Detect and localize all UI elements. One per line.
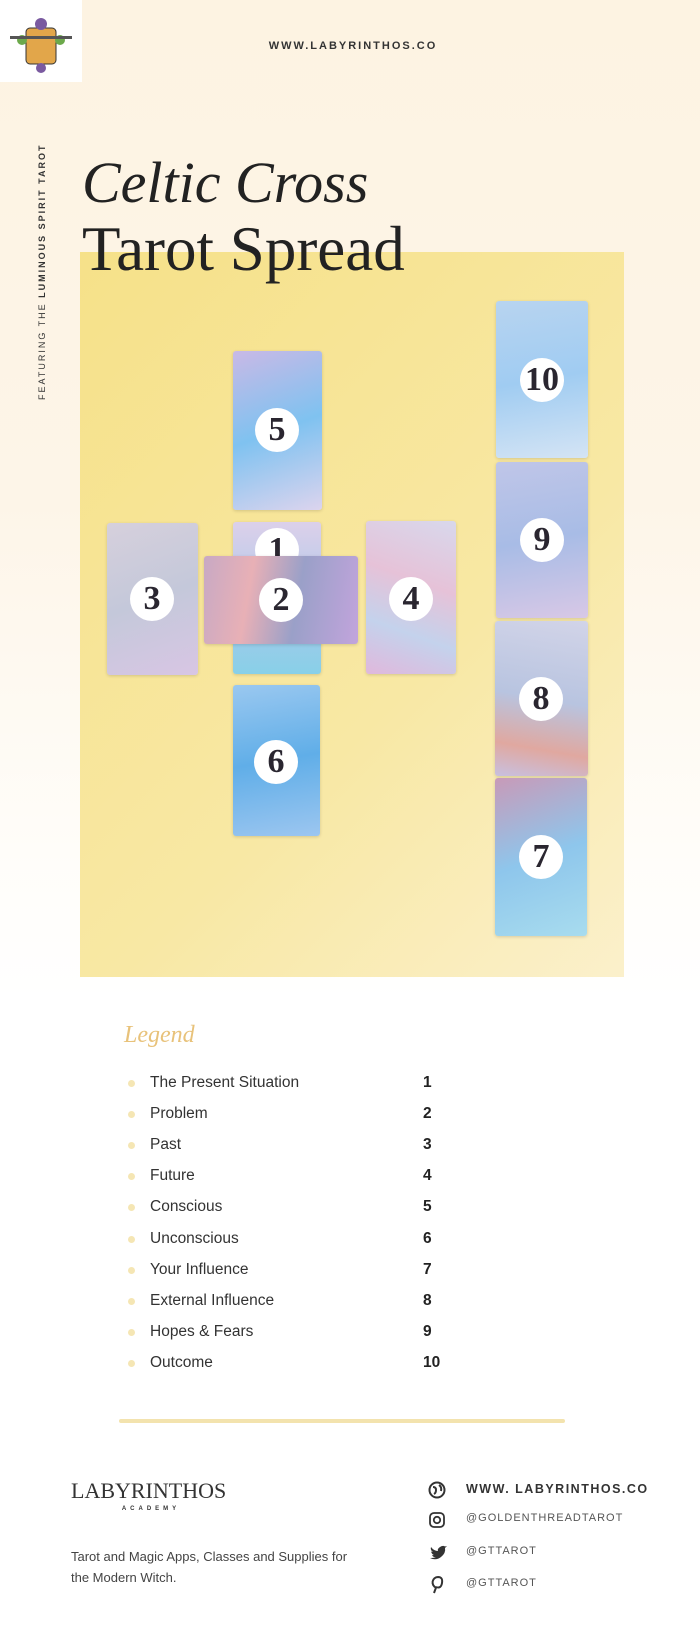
legend list: 9 (423, 1323, 432, 1340)
legend list: 8 (423, 1292, 432, 1309)
card 2: 2 (272, 581, 290, 618)
text: @GTTAROT (466, 1577, 537, 1589)
legend list: Hopes & Fears (150, 1323, 253, 1340)
card 1 (233, 522, 321, 674)
legend list: 1 (423, 1074, 432, 1091)
card 2 (204, 556, 358, 644)
card 3 (107, 523, 198, 675)
card 1: 1 (268, 531, 286, 568)
card 8 (495, 621, 588, 776)
legend list: Problem (150, 1105, 208, 1122)
legend list: 4 (423, 1167, 432, 1184)
header url: WWW.LABYRINTHOS.CO (269, 40, 437, 52)
legend list: Your Influence (150, 1261, 249, 1278)
yellow background panel (80, 252, 624, 977)
footer contacts (428, 1482, 447, 1594)
legend list: 5 (423, 1198, 432, 1215)
legend list: 3 (423, 1136, 432, 1153)
icon: instagram (429, 1512, 445, 1528)
legend list: External Influence (150, 1292, 274, 1309)
card 3: 3 (144, 580, 160, 617)
legend list: Unconscious (150, 1230, 239, 1247)
legend list: Past (150, 1136, 181, 1153)
card 8: 8 (532, 680, 550, 717)
card 7 (495, 778, 587, 936)
legend list: 10 (423, 1354, 440, 1371)
text: @GOLDENTHREADTAROT (466, 1512, 623, 1524)
card 10: 10 (525, 361, 559, 398)
text: WWW. LABYRINTHOS.CO (466, 1482, 649, 1496)
title: Celtic Cross (82, 150, 368, 215)
card 4 (366, 521, 456, 674)
text: @GTTAROT (466, 1545, 537, 1557)
card 9 (496, 462, 588, 618)
card 6: 6 (268, 743, 284, 780)
icon: twitter (430, 1546, 447, 1560)
footer brand: ACADEMY (122, 1506, 180, 1512)
legend heading: Legend (124, 1022, 195, 1048)
card 7: 7 (532, 838, 550, 875)
legend list: 2 (423, 1105, 432, 1122)
title (82, 150, 405, 284)
card 10 (496, 301, 588, 458)
legend list (128, 1074, 440, 1371)
legend list: 7 (423, 1261, 432, 1278)
legend list: Future (150, 1167, 195, 1184)
legend list: 6 (423, 1230, 432, 1247)
card 5: 5 (268, 411, 286, 448)
footer brand: LABYRINTHOS (71, 1478, 226, 1503)
card 5 (233, 351, 322, 510)
title: Tarot Spread (82, 214, 405, 284)
footer tagline: Tarot and Magic Apps, Classes and Supplies for the Modern Witch. (71, 1549, 347, 1585)
logo box (0, 0, 82, 82)
icon: globe (428, 1482, 446, 1498)
legend list: Conscious (150, 1198, 222, 1215)
card 9: 9 (534, 521, 550, 558)
icon: pinterest (432, 1576, 444, 1594)
legend list: The Present Situation (150, 1074, 299, 1091)
legend list: Outcome (150, 1354, 213, 1371)
card 4: 4 (402, 580, 420, 617)
vertical caption: FEATURING THE LUMINOUS SPIRIT TAROT (37, 143, 47, 400)
card 6 (233, 685, 320, 836)
